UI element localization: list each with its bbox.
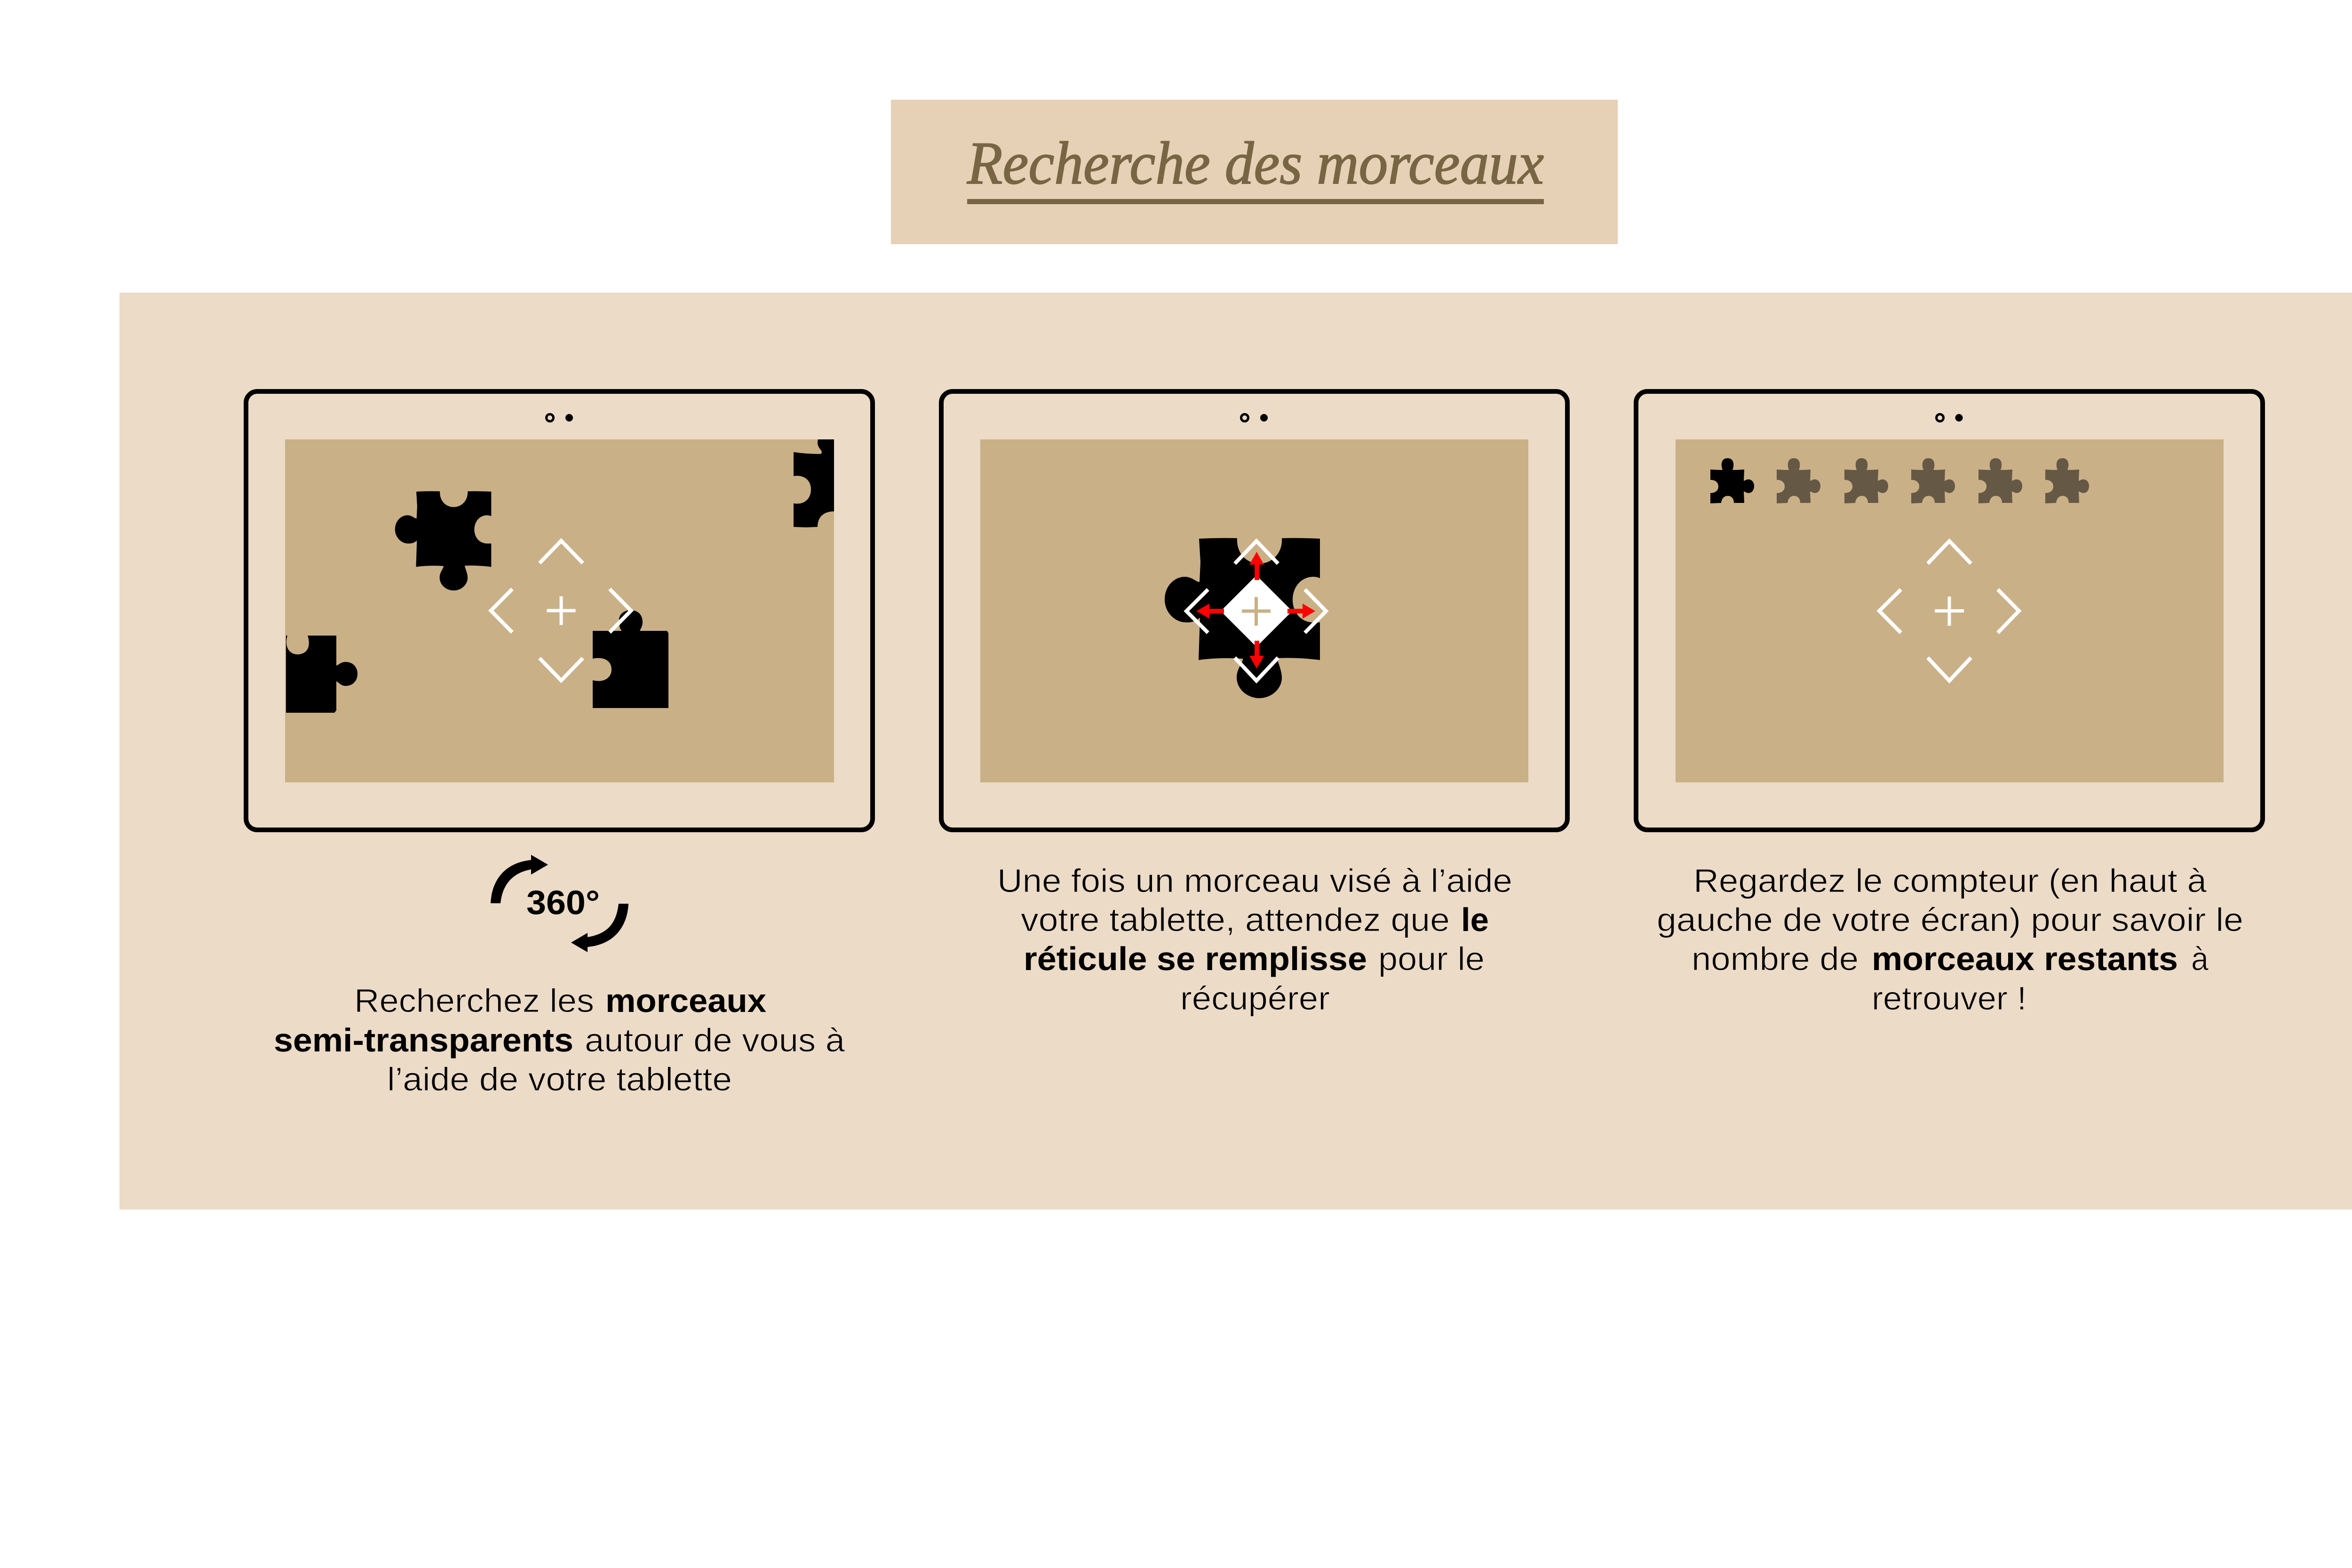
- text block: step 2: [997, 862, 1512, 1017]
- icon: reticle: [1186, 541, 1326, 681]
- text block: step 3: gauche de votre écran) pour savoir le: [1657, 901, 2243, 938]
- text block: step 1: [274, 982, 845, 1098]
- text block: step 2: Une fois un morceau visé à l’aide: [997, 862, 1512, 899]
- icon: reticle: [491, 541, 631, 680]
- tablet screen: [1676, 439, 2224, 782]
- panel: step 1 tablet: [246, 391, 873, 830]
- icon: 360 degree rotation: [491, 855, 628, 952]
- text block: step 3: nombre de: [1692, 940, 1859, 977]
- puzzle piece bottom left: [286, 636, 358, 713]
- puzzle piece top right: [794, 439, 834, 527]
- tablet screen: [285, 439, 834, 782]
- icon: tablet camera: [1241, 414, 1268, 422]
- text block: step 3: [1657, 862, 2243, 1017]
- text block: step 2: pour le: [1378, 940, 1485, 977]
- text block: step 1: l’aide de votre tablette: [387, 1061, 732, 1098]
- title underline: [967, 199, 1544, 204]
- text block: step 1: Recherchez les: [354, 982, 594, 1019]
- puzzle piece bottom centre: [593, 610, 668, 708]
- text block: step 2: récupérer: [1180, 980, 1330, 1017]
- text block: step 3: Regardez le compteur (en haut à: [1693, 862, 2207, 899]
- main panel: [119, 293, 2352, 1210]
- tablet screen: [980, 439, 1528, 782]
- counter: remaining pieces: [1710, 458, 2089, 503]
- text block: step 2: le: [1461, 901, 1489, 938]
- icon: 360 degree rotation: 360°: [526, 884, 600, 922]
- icon: reticle: [1879, 541, 2019, 681]
- text block: step 2: réticule se remplisse: [1024, 940, 1367, 977]
- filled reticle centre: [1221, 575, 1292, 647]
- text block: step 2: votre tablette, attendez que: [1021, 901, 1450, 938]
- arrows: reticle expanding: [1197, 552, 1315, 669]
- puzzle piece top left: [395, 491, 491, 590]
- icon: tablet camera: [547, 414, 573, 422]
- icon: tablet camera: [1936, 414, 1963, 422]
- title banner: [891, 100, 1618, 244]
- text block: step 1: autour de vous à: [585, 1022, 845, 1059]
- text block: step 3: retrouver !: [1872, 980, 2026, 1017]
- text block: step 3: à: [2191, 940, 2209, 977]
- text block: step 1: semi-transparents: [274, 1022, 573, 1059]
- panel: step 3 tablet: [1636, 391, 2263, 830]
- text block: step 3: morceaux restants: [1872, 940, 2178, 977]
- panel: step 2 tablet: [941, 391, 1567, 830]
- text block: step 1: morceaux: [605, 982, 766, 1019]
- title text: Recherche des morceaux: [967, 129, 1544, 197]
- puzzle piece aimed at: [1165, 538, 1320, 698]
